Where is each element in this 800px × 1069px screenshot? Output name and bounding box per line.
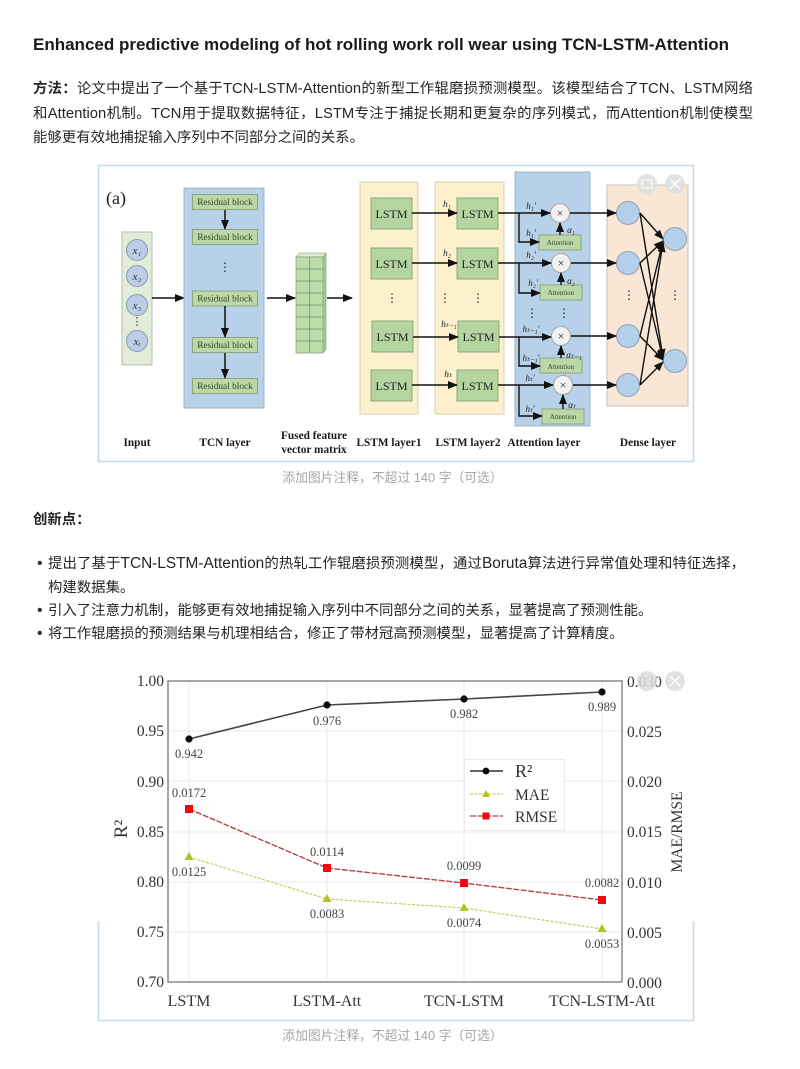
- TCN layer: ⋮: [219, 260, 231, 274]
- left axis ticks: 0.85: [137, 824, 164, 841]
- left axis ticks: 0.90: [137, 774, 164, 791]
- axis titles: R²: [111, 820, 132, 838]
- title: Enhanced predictive modeling of hot rolling work roll wear using TCN-LSTM-Attention: [33, 35, 729, 54]
- x axis labels: LSTM-Att: [293, 993, 362, 1010]
- Attention layer: h₁': [526, 228, 537, 238]
- x axis labels: TCN-LSTM: [424, 993, 504, 1010]
- input column: x₃: [132, 300, 142, 312]
- image toolbar icons: [637, 671, 685, 691]
- text block: method: 和Attention机制。TCN用于提取数据特征，LSTM专注于捕捉长期和更复杂的序列模式，而Attention机制使模型: [33, 106, 753, 122]
- Attention layer: α₂: [567, 276, 575, 286]
- Attention layer: Attention: [550, 413, 577, 421]
- TCN layer: [184, 188, 264, 408]
- left axis ticks: 0.75: [137, 924, 164, 941]
- panel: architecture diagram: [98, 164, 694, 462]
- axis titles: [111, 792, 686, 872]
- TCN layer: Residual block: [197, 294, 253, 304]
- LSTM layer 2: LSTM: [461, 207, 494, 221]
- axis titles: MAE/RMSE: [669, 792, 686, 872]
- chart frame remnants: [98, 921, 694, 1020]
- Attention layer: ⋮: [526, 306, 538, 320]
- data labels: 0.0172: [172, 786, 206, 800]
- plot axes: [168, 681, 622, 982]
- LSTM layer 1: ⋮: [386, 291, 398, 305]
- Attention layer: h₂': [526, 250, 537, 260]
- LSTM layer 2: LSTM: [462, 330, 495, 344]
- bullet list: 将工作辊磨损的预测结果与机理相结合，修正了带材冠高预测模型，显著提高了计算精度。: [48, 626, 624, 642]
- LSTM layer 2: ⋮: [472, 291, 484, 305]
- Attention layer: hₜ₋₁': [523, 324, 541, 334]
- LSTM layer 2: h₁: [443, 200, 451, 210]
- arrow: matrix to LSTM: [327, 297, 352, 299]
- Attention layer: α₁: [567, 225, 575, 235]
- left axis ticks: 1.00: [137, 673, 164, 690]
- Dense layer: [570, 185, 688, 406]
- data labels: 0.0099: [447, 859, 481, 873]
- layer labels: TCN layer: [199, 437, 251, 449]
- Attention layer: h₁': [526, 201, 537, 211]
- bullet list: 构建数据集。: [48, 580, 134, 596]
- image toolbar icons: [637, 174, 685, 194]
- TCN layer: Residual block: [197, 198, 253, 208]
- bullet markers: •: [37, 555, 43, 572]
- LSTM layer 1: LSTM: [375, 379, 408, 393]
- legend: R²: [515, 761, 532, 781]
- input column: xᵢ: [133, 336, 141, 348]
- data labels: 0.942: [175, 747, 203, 761]
- right axis ticks: [627, 674, 662, 992]
- grid lines: [168, 681, 622, 982]
- Attention layer: hₜ₋₁': [523, 353, 541, 363]
- LSTM layer 2: [412, 182, 504, 414]
- data labels: 0.0053: [585, 937, 619, 951]
- text block: method: 方法：论文中提出了一个基于TCN-LSTM-Attention的新型工作辊磨损预测模型。该模型结合了TCN、LSTM网络: [33, 81, 753, 97]
- caption 2: 添加图片注释，不超过 140 字（可选）: [282, 1028, 503, 1043]
- Attention layer: hₜ': [525, 404, 536, 414]
- layer labels: [123, 430, 676, 456]
- Attention layer: αₜ₋₁: [566, 350, 582, 360]
- legend: [464, 760, 564, 830]
- left axis ticks: [137, 673, 164, 991]
- layer labels: Attention layer: [507, 437, 581, 449]
- LSTM layer 2: hₜ₋₁: [441, 320, 457, 330]
- Attention layer: ⋮: [558, 306, 570, 320]
- right axis ticks: 0.005: [627, 925, 662, 942]
- bullet markers: [37, 555, 43, 642]
- caption 1: 添加图片注释，不超过 140 字（可选）: [282, 470, 503, 485]
- TCN layer: Residual block: [197, 382, 253, 392]
- Dense layer: ⋮: [669, 288, 681, 302]
- data labels: 0.0074: [447, 916, 482, 930]
- layer labels: LSTM layer1: [357, 437, 422, 449]
- LSTM layer 1: LSTM: [376, 330, 409, 344]
- fused feature matrix: [296, 253, 326, 353]
- Attention layer: Attention: [548, 289, 575, 297]
- label (a): (a): [106, 188, 126, 209]
- Attention layer: Attention: [548, 363, 575, 371]
- LSTM layer 1: LSTM: [375, 207, 408, 221]
- data labels: 0.0114: [310, 845, 345, 859]
- LSTM layer 2: LSTM: [461, 257, 494, 271]
- LSTM layer 2: LSTM: [461, 379, 494, 393]
- left axis ticks: 0.95: [137, 723, 164, 740]
- input column: x₁: [132, 245, 142, 257]
- text block: method: [33, 80, 753, 146]
- series: R2: [185, 688, 606, 743]
- legend: MAE: [515, 787, 549, 804]
- right axis ticks: 0.000: [627, 975, 662, 992]
- Attention layer: ×: [557, 206, 563, 220]
- data labels: [172, 700, 619, 951]
- bullet list: 提出了基于TCN-LSTM-Attention的热轧工作辊磨损预测模型，通过Boruta算法进行异常值处理和特征选择，: [48, 555, 745, 572]
- layer labels: LSTM layer2: [436, 437, 501, 449]
- heading: innovations: 创新点：: [33, 512, 91, 528]
- right axis ticks: 0.020: [627, 774, 662, 791]
- LSTM layer 1: LSTM: [375, 257, 408, 271]
- layer labels: Fused feature: [281, 430, 347, 442]
- input column: ⋮: [132, 316, 142, 328]
- Attention layer: ×: [558, 329, 564, 343]
- input column: x₂: [132, 271, 142, 283]
- Attention layer: [498, 172, 590, 426]
- data labels: 0.0082: [585, 876, 619, 890]
- data labels: 0.989: [588, 700, 616, 714]
- bullet list: [48, 555, 745, 642]
- Attention layer: ×: [558, 256, 564, 270]
- bullet list: 引入了注意力机制，能够更有效地捕捉输入序列中不同部分之间的关系，显著提高了预测性能。: [48, 603, 652, 619]
- right axis ticks: 0.025: [627, 724, 662, 741]
- LSTM layer 2: h₂: [443, 249, 452, 259]
- layer labels: Dense layer: [620, 437, 676, 449]
- Attention layer: ×: [560, 378, 566, 392]
- Attention layer: h₂': [528, 278, 539, 288]
- data labels: 0.982: [450, 707, 478, 721]
- arrow: TCN to matrix: [267, 297, 295, 299]
- Attention layer: hₜ': [525, 373, 536, 383]
- Dense layer: ⋮: [623, 288, 635, 302]
- left axis ticks: 0.80: [137, 874, 164, 891]
- right axis ticks: 0.010: [627, 875, 662, 892]
- input column: [122, 232, 152, 365]
- text block: method: 能够更有效地捕捉输入序列中不同部分之间的关系。: [33, 130, 364, 146]
- bullet markers: •: [37, 625, 43, 642]
- TCN layer: Residual block: [197, 341, 253, 351]
- data labels: 0.0125: [172, 865, 206, 879]
- data labels: 0.0083: [310, 907, 344, 921]
- x axis labels: LSTM: [168, 993, 210, 1010]
- bullet markers: •: [37, 602, 43, 619]
- Attention layer: Attention: [547, 239, 574, 247]
- right axis ticks: 0.015: [627, 824, 662, 841]
- left axis ticks: 0.70: [137, 974, 164, 991]
- LSTM layer 2: hₜ: [444, 370, 452, 380]
- layer labels: Input: [123, 437, 151, 449]
- series: RMSE: [185, 805, 606, 904]
- LSTM layer 2: ⋮: [439, 291, 451, 305]
- arrow: input to TCN: [152, 297, 184, 299]
- right axis ticks: 0.030: [627, 674, 662, 691]
- series: MAE: [184, 852, 606, 932]
- TCN layer: Residual block: [197, 233, 253, 243]
- x axis labels: TCN-LSTM-Att: [549, 993, 655, 1010]
- legend: RMSE: [515, 809, 557, 826]
- Attention layer: αₜ: [568, 400, 576, 410]
- layer labels: vector matrix: [281, 444, 347, 456]
- x axis labels: [168, 993, 655, 1010]
- data labels: 0.976: [313, 714, 341, 728]
- LSTM layer 1: [360, 182, 418, 414]
